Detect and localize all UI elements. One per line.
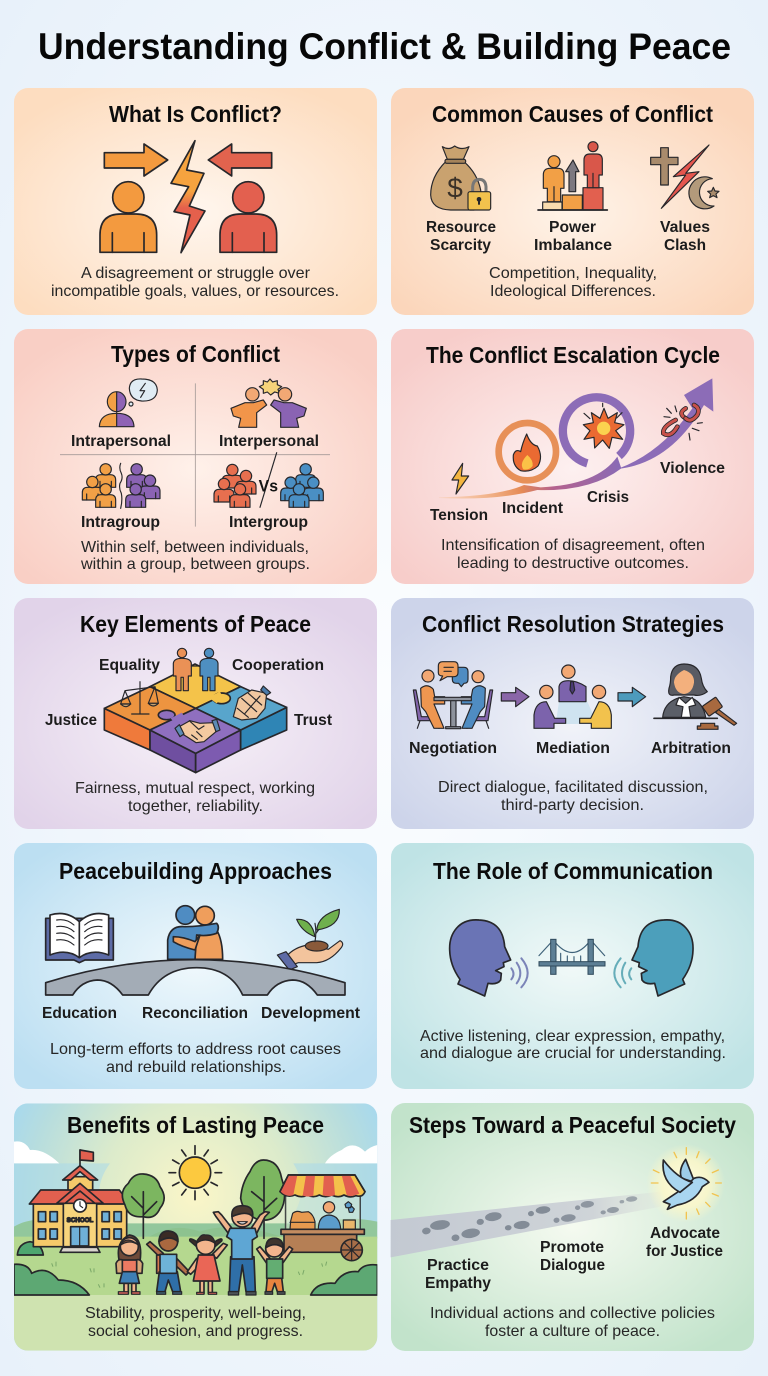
step labels: Advocate	[650, 1225, 720, 1242]
description: Competition, Inequality,	[489, 265, 657, 282]
icon: tension bolt	[452, 463, 469, 494]
stage labels: Incident	[502, 500, 564, 517]
description	[80, 539, 310, 573]
panel: types of conflict	[14, 329, 377, 584]
description: within a group, between groups.	[80, 556, 310, 573]
element labels	[45, 657, 333, 729]
element labels: Justice	[45, 712, 97, 729]
heading: Key Elements of Peace	[80, 611, 311, 637]
icon: handshake	[175, 719, 220, 743]
step labels	[425, 1225, 723, 1292]
description: Active listening, clear expression, empathy,	[420, 1028, 725, 1045]
type labels: Intrapersonal	[71, 433, 171, 450]
heading: Benefits of Lasting Peace	[67, 1112, 324, 1138]
icon: equal people	[173, 648, 191, 691]
heading: Steps Toward a Peaceful Society	[409, 1112, 736, 1138]
description: and dialogue are crucial for understanding.	[420, 1045, 726, 1062]
element labels: Equality	[99, 657, 160, 674]
stage labels	[430, 460, 725, 524]
cause labels	[426, 219, 710, 254]
icon: hand holding seedling	[277, 909, 343, 970]
icon: stacked hands	[233, 686, 271, 720]
icon: sound waves left	[511, 958, 528, 987]
figure: girl with backpack	[116, 1235, 143, 1294]
escalation spiral chart	[439, 378, 713, 499]
description	[85, 1305, 306, 1340]
description: incompatible goals, values, or resources.	[51, 283, 339, 300]
icon: speaking head left	[450, 920, 511, 996]
cause labels: Resource	[426, 219, 496, 236]
icon: speaking head right	[632, 920, 693, 996]
description	[430, 1305, 715, 1340]
figure: girl with pigtails	[187, 1235, 227, 1294]
figure: man with raised arms	[213, 1206, 269, 1295]
illustration: children and adult group	[116, 1206, 293, 1295]
description: Ideological Differences.	[490, 283, 656, 300]
icon: scales of justice	[121, 682, 158, 714]
heading: The Role of Communication	[433, 858, 713, 884]
heading: Common Causes of Conflict	[432, 101, 713, 127]
icon: intergroup	[214, 453, 323, 507]
type labels	[71, 433, 319, 531]
illustration: footprint path	[391, 1192, 661, 1257]
description	[50, 1041, 341, 1076]
description: Fairness, mutual respect, working	[75, 780, 315, 797]
description: foster a culture of peace.	[485, 1323, 660, 1340]
heading: What Is Conflict?	[109, 101, 282, 127]
description: Stability, prosperity, well-being,	[85, 1305, 306, 1322]
description	[420, 1028, 726, 1062]
heading: The Conflict Escalation Cycle	[426, 342, 720, 368]
heading: Conflict Resolution Strategies	[422, 611, 724, 637]
cause labels: Scarcity	[430, 237, 491, 254]
heading: Types of Conflict	[111, 341, 280, 367]
icon: crisis explosion	[583, 403, 624, 448]
panel: what is conflict	[14, 88, 377, 315]
panel: conflict resolution strategies	[391, 598, 754, 829]
approach labels: Education	[42, 1005, 117, 1022]
step labels: Promote	[540, 1239, 604, 1256]
description: Within self, between individuals,	[81, 539, 309, 556]
icon: school building: SCHOOL	[67, 1217, 93, 1224]
panel: peacebuilding approaches	[14, 843, 377, 1089]
icon: intrapersonal	[99, 379, 157, 427]
description: leading to destructive outcomes.	[457, 555, 689, 572]
panel: common causes of conflict	[391, 88, 754, 315]
description: A disagreement or struggle over	[81, 265, 311, 282]
description	[51, 265, 339, 300]
element labels: Trust	[294, 712, 333, 729]
icon: sound waves right	[614, 958, 631, 987]
step labels: for Justice	[646, 1243, 723, 1260]
grass tufts	[52, 1262, 327, 1288]
strategy labels	[409, 740, 731, 757]
description: Long-term efforts to address root causes	[50, 1041, 341, 1058]
description	[438, 779, 708, 814]
icon: sun	[169, 1146, 222, 1200]
icon: market stall	[280, 1175, 365, 1261]
icon: arbitration judge with gavel	[654, 664, 737, 729]
description: Direct dialogue, facilitated discussion,	[438, 779, 708, 796]
icon: school building	[17, 1150, 130, 1255]
strategy labels: Arbitration	[651, 740, 731, 757]
strategy labels: Mediation	[536, 740, 610, 757]
description: Individual actions and collective policies	[430, 1305, 715, 1322]
cause labels: Values	[660, 219, 710, 236]
icon: intergroup: Vs	[259, 476, 278, 495]
panel: role of communication	[391, 843, 754, 1089]
description	[75, 780, 315, 815]
icon: right bush	[311, 1265, 377, 1295]
icon: isometric puzzle	[104, 648, 287, 773]
description: Intensification of disagreement, often	[441, 537, 705, 554]
arrow	[618, 687, 646, 707]
type labels: Interpersonal	[219, 433, 319, 450]
strategy labels: Negotiation	[409, 740, 497, 757]
approach labels	[42, 1005, 361, 1022]
icon: open book	[46, 913, 113, 963]
icon: left tree	[122, 1174, 164, 1238]
illustration: community scene	[14, 1103, 377, 1351]
heading: Peacebuilding Approaches	[59, 858, 332, 884]
panel: conflict escalation cycle	[391, 329, 754, 584]
description: and rebuild relationships.	[106, 1059, 286, 1076]
arrow	[501, 687, 529, 707]
icon: two people clashing with lightning	[100, 141, 277, 253]
type labels: Intragroup	[81, 514, 160, 531]
element labels: Cooperation	[232, 657, 324, 674]
icon: intragroup	[82, 463, 160, 508]
icon: left bush	[14, 1264, 89, 1295]
type labels: Intergroup	[229, 514, 308, 531]
icon: embracing people	[168, 906, 223, 959]
description	[489, 265, 657, 300]
description	[441, 537, 705, 572]
icon: negotiation	[413, 662, 493, 729]
icon: money bag with padlock	[431, 146, 491, 210]
icon: interpersonal	[231, 379, 306, 427]
panel: benefits of lasting peace	[14, 1103, 377, 1351]
figure: small boy	[257, 1238, 293, 1294]
icon: mediation	[534, 665, 611, 728]
icon: bridge	[46, 960, 345, 995]
icon: dove with rays	[646, 1144, 725, 1223]
cause labels: Clash	[664, 237, 706, 254]
step labels: Practice	[427, 1257, 489, 1274]
description: together, reliability.	[128, 798, 263, 815]
step labels: Empathy	[425, 1275, 491, 1292]
stage labels: Crisis	[587, 489, 629, 506]
approach labels: Reconciliation	[142, 1005, 248, 1022]
description: social cohesion, and progress.	[88, 1323, 303, 1340]
step labels: Dialogue	[540, 1257, 605, 1274]
stage labels: Violence	[660, 460, 725, 477]
description: third-party decision.	[501, 797, 644, 814]
cause labels: Power	[549, 219, 596, 236]
panel: steps toward a peaceful society	[391, 1103, 754, 1351]
icon: broken chain	[663, 405, 702, 440]
panel: key elements of peace	[14, 598, 377, 829]
title: Understanding Conflict & Building Peace	[38, 26, 731, 67]
icon: values clash	[651, 145, 719, 209]
figure: boy	[147, 1231, 189, 1294]
stage labels: Tension	[430, 507, 488, 524]
icon: incident flame	[513, 434, 541, 471]
icon: right tree	[241, 1160, 285, 1238]
icon: bridge between speakers	[539, 939, 605, 974]
icon: power imbalance steps	[538, 142, 607, 210]
cause labels: Imbalance	[534, 237, 612, 254]
approach labels: Development	[261, 1005, 361, 1022]
icon: money bag with padlock: $	[447, 172, 463, 203]
